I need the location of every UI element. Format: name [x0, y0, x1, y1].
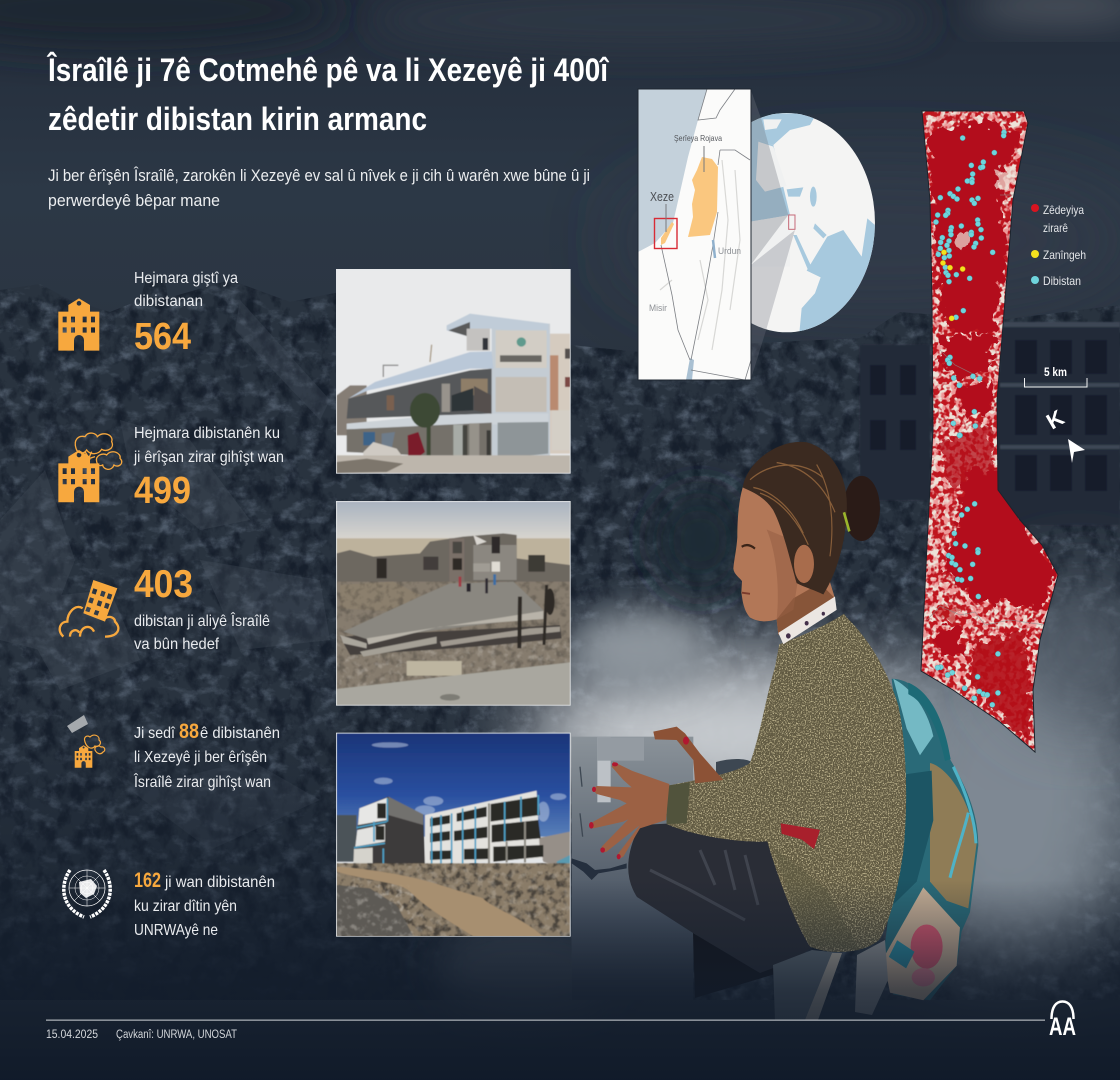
map legend: zirarê — [1043, 221, 1068, 235]
title: Îsraîlê ji 7ê Cotmehê pê va li Xezeyê ji 400î — [46, 52, 610, 88]
stat: 162 UNRWA schools: 162 — [134, 869, 161, 892]
stat: targeted schools 403: 403 — [134, 563, 193, 606]
elbow shadow behind the arm — [716, 759, 752, 782]
footer: 15.04.2025 — [46, 1029, 98, 1041]
stat: 162 UNRWA schools: UNRWAyê ne — [134, 922, 218, 939]
trousers — [628, 822, 815, 998]
stat: 162 UNRWA schools: ku zirar dîtin yên — [134, 898, 237, 915]
map legend: Zêdeyiya — [1043, 203, 1084, 217]
damage map of Gaza strip — [915, 105, 1065, 760]
map legend: Zanîngeh — [1043, 248, 1086, 262]
title: zêdetir dibistan kirin armanc — [48, 101, 427, 137]
photo: bombed three-storey school under blue sky — [336, 733, 571, 937]
icon: UN emblem — [64, 870, 110, 917]
scale bar 5 km: 5 km — [1044, 367, 1067, 379]
shelter markers — [940, 250, 965, 321]
stat: targeted schools 403: va bûn hedef — [134, 636, 220, 653]
subtitle: Ji ber êrîşên Îsraîlê, zarokên li Xezeyê ev sal û nîvek e ji cih û warên xwe bûne û ji — [48, 166, 590, 185]
head and hair — [733, 442, 880, 644]
photo: damaged UNRWA school building — [336, 269, 571, 474]
stat: damaged schools 499 — [58, 425, 284, 512]
photo: girl with backpack sitting by the wall — [589, 442, 978, 1020]
stat: damaged schools 499: ji êrîşan zirar gihîşt wan — [133, 449, 284, 466]
stat: total schools 564: dibistanan — [134, 293, 203, 310]
map: Israel, Palestine and neighbours: Şerîeya Rojava — [674, 133, 722, 143]
scale bar 5 km — [1024, 367, 1087, 387]
map: Israel, Palestine and neighbours — [638, 89, 751, 380]
backpack — [883, 679, 978, 1000]
stat: 162 UNRWA schools: ji wan dibistanên — [164, 874, 275, 891]
subtitle: perwerdeyê bêpar mane — [48, 191, 220, 210]
north arrow: K — [1042, 405, 1068, 434]
stat: 88 percent damaged: Îsraîlê zirar gihîşt wan — [133, 772, 271, 791]
icon: school building — [58, 298, 99, 351]
stat: 162 UNRWA schools — [64, 869, 275, 939]
locator map: globe with magnified area — [638, 89, 877, 380]
stat: total schools 564: Hejmara giştî ya — [134, 270, 238, 287]
subtitle — [48, 166, 590, 210]
bottom shadow — [0, 880, 1120, 1080]
stat: targeted schools 403 — [60, 563, 270, 653]
icon: collapsing building — [60, 580, 118, 637]
map legend — [1031, 203, 1086, 288]
map legend: Dibistan — [1043, 274, 1081, 288]
stat: total schools 564 — [58, 270, 238, 358]
school markers north — [933, 130, 1007, 438]
icon: damaged school with smoke — [58, 433, 122, 502]
map: Israel, Palestine and neighbours: Xeze — [650, 189, 674, 204]
north arrow — [1042, 405, 1085, 463]
hands — [589, 727, 723, 859]
school markers south — [935, 433, 1001, 707]
map: Israel, Palestine and neighbours: Misir — [649, 303, 667, 314]
stat: 88 percent damaged: 88 — [179, 720, 199, 743]
zoom cone — [751, 89, 788, 265]
logo: Anadolu Agency — [1049, 1002, 1076, 1041]
shoes — [773, 940, 888, 1020]
sweater — [667, 614, 906, 952]
footer: Çavkanî: UNRWA, UNOSAT — [116, 1029, 237, 1041]
map: Israel, Palestine and neighbours: Urdun — [718, 246, 741, 257]
stat: 88 percent damaged: ê dibistanên — [200, 725, 280, 742]
title — [46, 52, 610, 137]
concrete wall block — [572, 737, 693, 1000]
globe — [752, 92, 875, 376]
stat: damaged schools 499: Hejmara dibistanên ku — [134, 425, 280, 442]
stat: damaged schools 499: 499 — [134, 470, 191, 512]
footer — [46, 1002, 1076, 1041]
stat: total schools 564: 564 — [134, 316, 191, 358]
stat: 88 percent damaged: li Xezeyê ji ber êrîşên — [134, 749, 267, 766]
photo: collapsed school slab and ruins — [336, 501, 571, 706]
stat: targeted schools 403: dibistan ji aliyê Îsraîlê — [134, 611, 270, 630]
stat: 88 percent damaged — [75, 720, 280, 791]
icon: small damaged school — [75, 735, 105, 768]
stat: 88 percent damaged: Ji sedî — [134, 725, 175, 742]
logo: Anadolu Agency: AA — [1049, 1013, 1076, 1041]
